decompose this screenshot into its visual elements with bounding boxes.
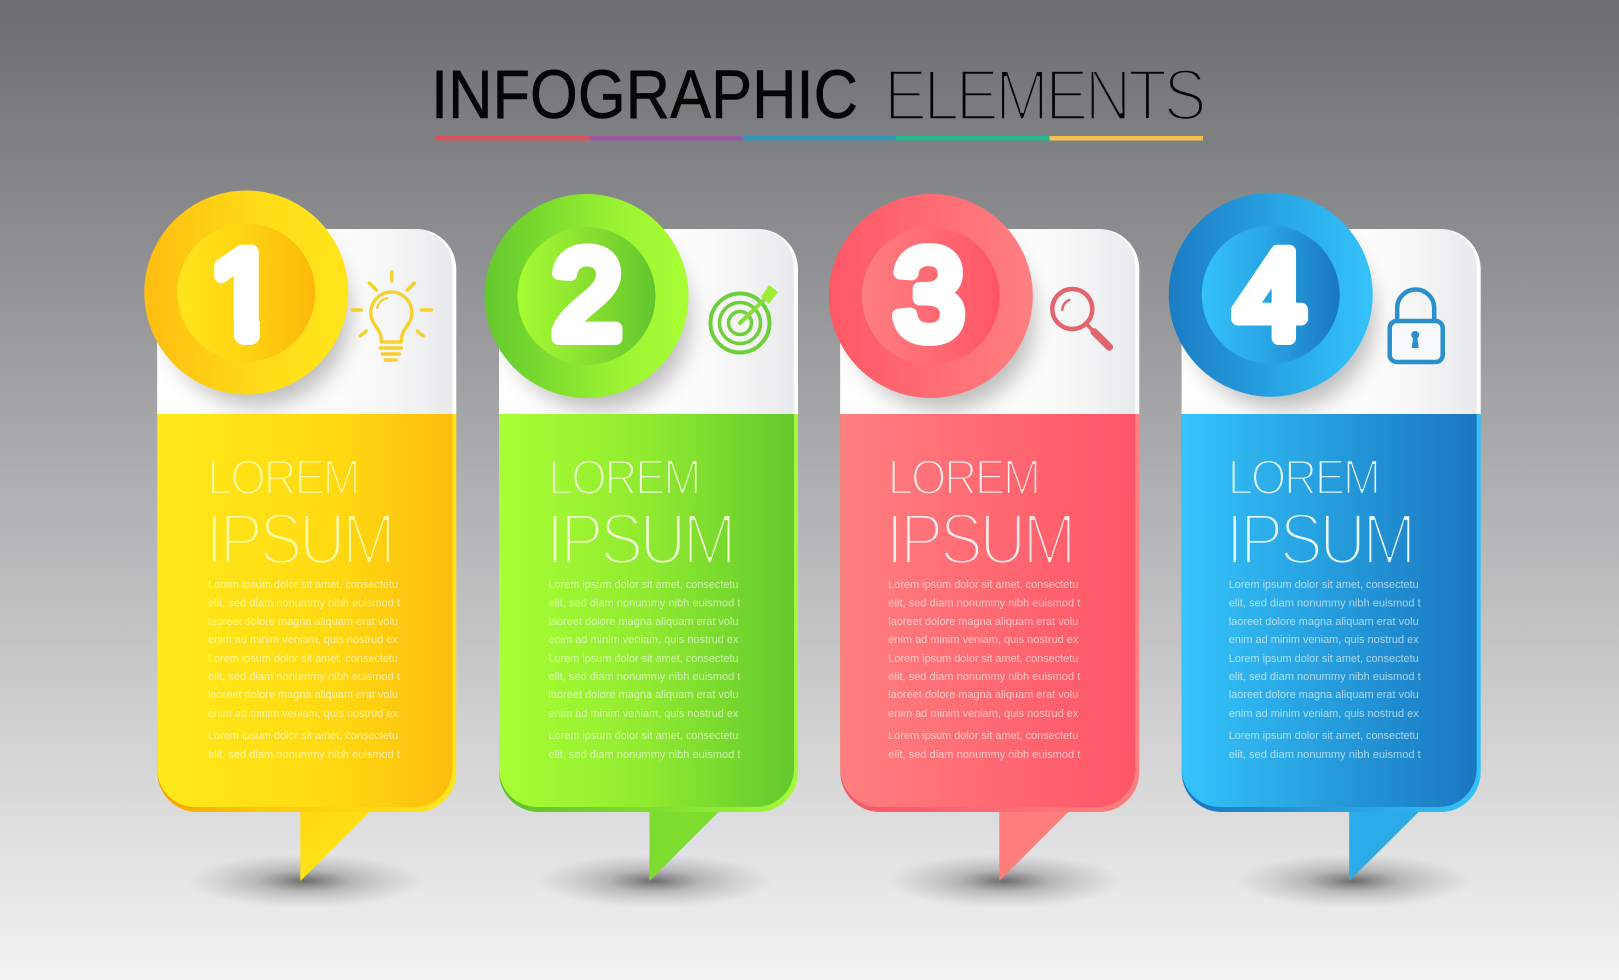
body text: elit, sed diam nonummy nibh euismod t: [1229, 598, 1421, 610]
heading: IPSUM: [1226, 500, 1413, 580]
pointer tail: [300, 800, 381, 881]
header face: [157, 229, 452, 414]
icon: magnifying glass: [1052, 289, 1109, 347]
body text: elit, sed diam nonummy nibh euismod t: [208, 671, 400, 683]
card body: [840, 414, 1135, 807]
pointer tail: [1349, 800, 1431, 881]
body text: elit, sed diam nonummy nibh euismod t: [208, 749, 400, 761]
header rim: [157, 229, 456, 414]
heading: LOREM: [548, 451, 699, 505]
circle shadow: [506, 226, 690, 410]
title light word: ELEMENTS: [884, 56, 1204, 136]
panel 4: blue: [1169, 193, 1481, 908]
body text: laoreet dolore magna aliquam erat volu: [548, 689, 738, 701]
card back: [157, 414, 456, 812]
card back: [840, 414, 1139, 812]
body text: laoreet dolore magna aliquam erat volu: [1229, 689, 1419, 701]
body text: Lorem ipsum dolor sit amet, consectetu: [1229, 730, 1419, 742]
body text: enim ad minim veniam, quis nostrud ex: [548, 634, 739, 646]
card back: [1182, 414, 1481, 812]
body text: Lorem ipsum dolor sit amet, consectetu: [548, 730, 738, 742]
card body: [499, 414, 794, 807]
body text: laoreet dolore magna aliquam erat volu: [888, 689, 1078, 701]
body text: elit, sed diam nonummy nibh euismod t: [1229, 671, 1421, 683]
panel 2: green: [484, 194, 798, 908]
body text: elit, sed diam nonummy nibh euismod t: [888, 749, 1080, 761]
header face: [499, 229, 794, 414]
ground shadow: [187, 854, 423, 908]
number circle: [1169, 193, 1373, 397]
panel 1: yellow: [144, 190, 456, 908]
body text: Lorem ipsum dolor sit amet, consectetu: [208, 579, 398, 591]
body text: elit, sed diam nonummy nibh euismod t: [548, 749, 741, 761]
body text: Lorem ipsum dolor sit amet, consectetu: [1229, 579, 1419, 591]
header face: [840, 229, 1135, 414]
title bold word: INFOGRAPHIC: [431, 56, 858, 133]
header face: [1182, 229, 1477, 414]
panel 3: red: [829, 194, 1139, 908]
body text: laoreet dolore magna aliquam erat volu: [208, 689, 398, 701]
body text: [888, 579, 1080, 761]
circle shadow: [850, 226, 1034, 410]
heading: [1226, 451, 1413, 580]
body text: Lorem ipsum dolor sit amet, consectetu: [548, 653, 738, 665]
number 1: 1: [209, 226, 279, 365]
heading: [546, 451, 733, 580]
body text: [208, 579, 400, 761]
header rim: [1182, 229, 1481, 414]
body text: enim ad minim veniam, quis nostrud ex: [208, 634, 398, 646]
number 2: 2: [552, 226, 622, 365]
body text: Lorem ipsum dolor sit amet, consectetu: [1229, 653, 1419, 665]
number 3: 3: [894, 226, 964, 365]
body text: Lorem ipsum dolor sit amet, consectetu: [548, 579, 738, 591]
body text: [1229, 579, 1421, 761]
heading: IPSUM: [546, 500, 733, 580]
title underline: [436, 136, 1203, 140]
header rim: [499, 229, 798, 414]
body text: Lorem ipsum dolor sit amet, consectetu: [208, 730, 398, 742]
heading: IPSUM: [886, 500, 1073, 580]
body text: laoreet dolore magna aliquam erat volu: [888, 616, 1078, 628]
icon: target with arrow: [710, 285, 778, 352]
title: [431, 56, 1204, 136]
body text: enim ad minim veniam, quis nostrud ex: [888, 634, 1079, 646]
body text: laoreet dolore magna aliquam erat volu: [1229, 616, 1419, 628]
body text: elit, sed diam nonummy nibh euismod t: [548, 671, 741, 683]
body text: Lorem ipsum dolor sit amet, consectetu: [888, 653, 1078, 665]
number circle: [144, 190, 348, 394]
body text: elit, sed diam nonummy nibh euismod t: [888, 671, 1080, 683]
ground shadow: [1236, 854, 1472, 908]
card back: [499, 414, 798, 812]
heading: [886, 451, 1073, 580]
body text: elit, sed diam nonummy nibh euismod t: [548, 598, 741, 610]
number 4: 4: [1235, 226, 1305, 365]
body text: enim ad minim veniam, quis nostrud ex: [208, 708, 398, 720]
body text: Lorem ipsum dolor sit amet, consectetu: [208, 653, 398, 665]
body text: elit, sed diam nonummy nibh euismod t: [1229, 749, 1421, 761]
ground shadow: [886, 854, 1122, 908]
body text: elit, sed diam nonummy nibh euismod t: [888, 598, 1080, 610]
number circle: [484, 194, 688, 398]
body text: laoreet dolore magna aliquam erat volu: [548, 616, 738, 628]
body text: elit, sed diam nonummy nibh euismod t: [208, 598, 400, 610]
body text: enim ad minim veniam, quis nostrud ex: [888, 708, 1079, 720]
circle shadow: [165, 222, 349, 406]
number circle: [829, 194, 1033, 398]
header rim: [840, 229, 1139, 414]
circle shadow: [1190, 225, 1374, 409]
card body: [157, 414, 452, 807]
pointer tail: [650, 800, 730, 881]
body text: enim ad minim veniam, quis nostrud ex: [548, 708, 739, 720]
body text: enim ad minim veniam, quis nostrud ex: [1229, 634, 1419, 646]
icon: light bulb: [352, 272, 431, 360]
heading: [205, 451, 392, 580]
body text: [548, 579, 740, 761]
body text: Lorem ipsum dolor sit amet, consectetu: [888, 730, 1078, 742]
body text: laoreet dolore magna aliquam erat volu: [208, 616, 398, 628]
heading: IPSUM: [205, 500, 392, 580]
heading: LOREM: [888, 451, 1039, 505]
body text: enim ad minim veniam, quis nostrud ex: [1229, 708, 1419, 720]
heading: LOREM: [1228, 451, 1379, 505]
card body: [1182, 414, 1477, 807]
ground shadow: [536, 854, 772, 908]
icon: padlock: [1390, 290, 1443, 362]
heading: LOREM: [207, 451, 358, 505]
pointer tail: [999, 800, 1080, 881]
body text: Lorem ipsum dolor sit amet, consectetu: [888, 579, 1078, 591]
